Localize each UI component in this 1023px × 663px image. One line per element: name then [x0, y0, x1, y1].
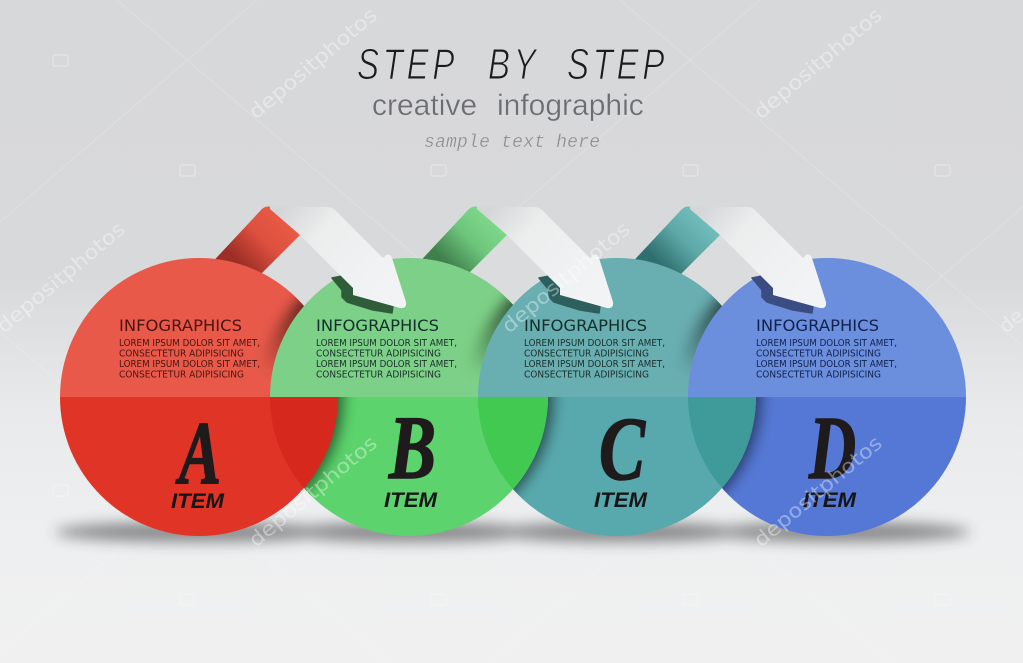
watermark text: depositphotos	[749, 431, 887, 552]
text block C: CONSECTETUR ADIPISICING	[524, 348, 649, 360]
circle C lower	[513, 397, 756, 536]
circle B upper	[270, 258, 513, 397]
letter D with item label: D	[808, 399, 856, 498]
text block B: INFOGRAPHICS	[316, 316, 439, 335]
text block A	[119, 316, 260, 380]
subtitle	[372, 89, 644, 122]
arrow B to C	[477, 207, 613, 313]
text block A: LOREM IPSUM DOLOR SIT AMET,	[119, 359, 260, 370]
text block D	[756, 316, 897, 380]
letter D with item label	[803, 399, 857, 512]
circle A upper	[60, 258, 304, 397]
text block D: LOREM IPSUM DOLOR SIT AMET,	[756, 359, 897, 370]
text block A: LOREM IPSUM DOLOR SIT AMET,	[119, 338, 260, 349]
title: STEP	[357, 41, 458, 89]
letter C with item label	[594, 400, 648, 512]
text block C: INFOGRAPHICS	[524, 316, 647, 335]
text block C	[524, 316, 665, 380]
title	[357, 41, 668, 89]
connector bands	[263, 235, 765, 312]
circle C upper	[478, 258, 722, 397]
subtitle: creative	[372, 89, 477, 122]
text block A: CONSECTETUR ADIPISICING	[119, 370, 244, 380]
watermark text: depositphotos	[749, 3, 887, 124]
text block A: INFOGRAPHICS	[119, 316, 242, 335]
arrow C to D	[690, 207, 826, 313]
letter A with item label: ITEM	[171, 490, 225, 513]
circle A lower	[60, 397, 338, 536]
upper half of circles	[60, 258, 966, 397]
text block B	[316, 316, 457, 380]
letter B with item label	[384, 399, 438, 512]
text block C: LOREM IPSUM DOLOR SIT AMET,	[524, 338, 665, 349]
letter D with item label: ITEM	[803, 489, 857, 512]
circle D upper	[688, 258, 966, 397]
lower half of circles	[60, 397, 966, 536]
text block B: CONSECTETUR ADIPISICING	[316, 348, 441, 360]
text block D: CONSECTETUR ADIPISICING	[756, 370, 881, 380]
strap: green	[412, 206, 507, 285]
tagline: sample text here	[424, 133, 600, 153]
text block B: LOREM IPSUM DOLOR SIT AMET,	[316, 338, 457, 349]
strap: teal	[625, 206, 720, 285]
text block B: LOREM IPSUM DOLOR SIT AMET,	[316, 359, 457, 370]
watermark text: depositphotos	[244, 3, 382, 124]
text block D: INFOGRAPHICS	[756, 316, 879, 335]
subtitle: infographic	[497, 89, 644, 122]
watermark text: depositphotos	[497, 217, 635, 338]
title: STEP	[567, 41, 668, 89]
text block C: LOREM IPSUM DOLOR SIT AMET,	[524, 359, 665, 370]
letter B with item label: ITEM	[384, 489, 438, 512]
circle B lower	[304, 397, 548, 536]
letter C with item label: C	[599, 400, 646, 499]
title block	[357, 41, 668, 153]
letter B with item label: B	[388, 399, 436, 498]
text block D: LOREM IPSUM DOLOR SIT AMET,	[756, 338, 897, 349]
text block C: CONSECTETUR ADIPISICING	[524, 370, 649, 380]
text block A: CONSECTETUR ADIPISICING	[119, 348, 244, 360]
letter C with item label: ITEM	[594, 489, 648, 512]
letter A with item label: A	[176, 404, 221, 503]
watermark text: depositphotos	[244, 431, 382, 552]
strap: red	[205, 206, 300, 285]
text block B: CONSECTETUR ADIPISICING	[316, 370, 441, 380]
letter A with item label	[171, 404, 225, 513]
arrow A to B	[270, 207, 406, 313]
ground shadow	[55, 522, 970, 542]
title: BY	[488, 41, 540, 89]
text block D: CONSECTETUR ADIPISICING	[756, 348, 881, 360]
circle D lower	[722, 397, 966, 536]
